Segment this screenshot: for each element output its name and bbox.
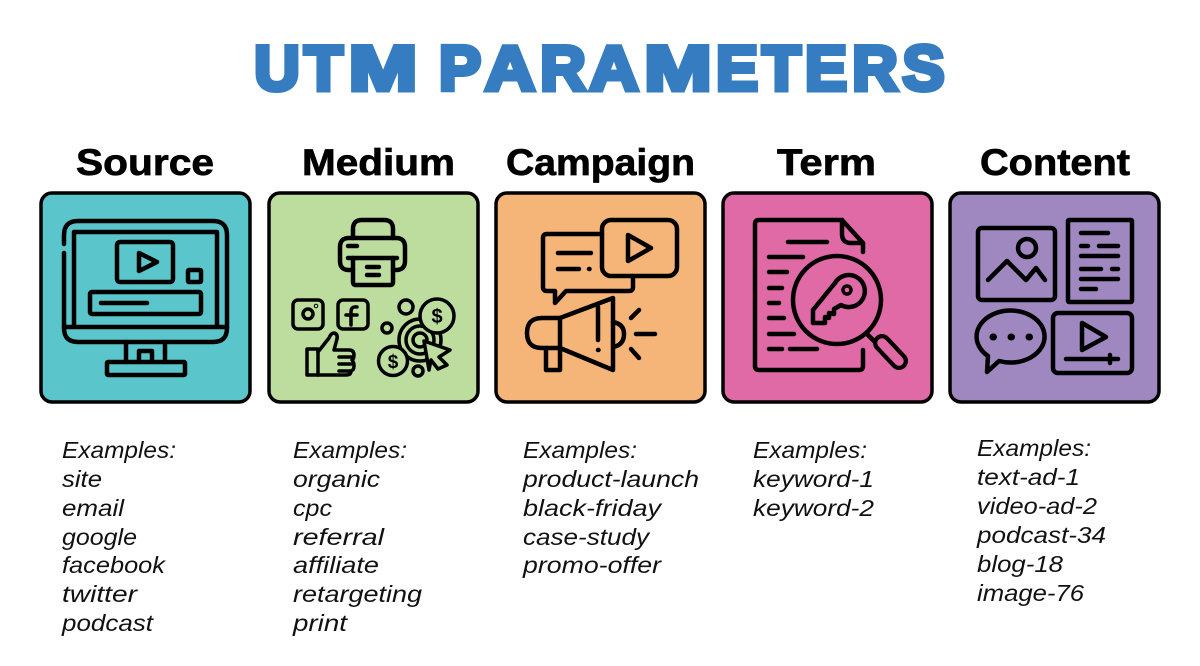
examples: source: facebook: [62, 552, 167, 578]
title: T: [304, 34, 343, 104]
examples: medium: cpc: [293, 495, 333, 521]
icon: video and chat bubbles: [543, 220, 677, 303]
title: R: [540, 34, 586, 104]
examples: content: video-ad-2: [977, 493, 1097, 519]
examples: campaign: product-launch: [522, 466, 699, 492]
examples: term: Examples:: [753, 437, 867, 463]
title: E: [805, 34, 847, 104]
examples: medium: [292, 437, 422, 636]
panel: source: [41, 193, 250, 402]
examples: medium: organic: [293, 466, 381, 492]
column: content: [950, 142, 1159, 606]
icon: computer monitor with video: [64, 221, 227, 375]
examples: medium: print: [292, 610, 349, 636]
column: campaign: [496, 142, 705, 578]
title: A: [484, 34, 535, 104]
examples: medium: affiliate: [293, 552, 379, 578]
examples: source: twitter: [62, 581, 139, 607]
examples: source: google: [62, 524, 137, 550]
column: medium: [269, 142, 478, 636]
examples: medium: retargeting: [293, 581, 422, 607]
icon: target with coins and cursor: $: [431, 306, 443, 328]
icon: target with coins and cursor: $: [388, 352, 399, 373]
examples: term: [753, 437, 874, 521]
title: U: [254, 34, 300, 104]
examples: content: podcast-34: [976, 522, 1106, 548]
title: [254, 34, 945, 104]
icon: printer: [340, 220, 405, 285]
column: term: [723, 142, 932, 521]
examples: content: image-76: [977, 580, 1084, 606]
heading: source: Source: [76, 142, 214, 183]
heading: content: Content: [980, 142, 1130, 183]
examples: term: keyword-2: [753, 495, 874, 521]
examples: campaign: Examples:: [523, 437, 637, 463]
examples: campaign: black-friday: [523, 495, 663, 521]
examples: source: [61, 437, 176, 636]
examples: content: text-ad-1: [977, 464, 1080, 490]
panel: term: [723, 193, 932, 402]
examples: term: keyword-1: [753, 466, 874, 492]
panel: medium: [269, 193, 478, 402]
icon: target with coins and cursor: [378, 299, 454, 376]
examples: content: [976, 435, 1106, 606]
icon: image: [978, 228, 1055, 300]
panel: campaign: [496, 193, 705, 402]
examples: medium: Examples:: [293, 437, 407, 463]
icon: speech bubble: [977, 311, 1045, 372]
icon: text document: [1068, 220, 1132, 302]
examples: medium: referral: [293, 524, 385, 550]
examples: source: Examples:: [62, 437, 176, 463]
title: P: [439, 34, 481, 104]
heading: medium: Medium: [302, 142, 455, 183]
title: E: [716, 34, 758, 104]
title: A: [589, 34, 639, 104]
icon: thumbs up: [307, 333, 354, 375]
panel: content: [950, 193, 1159, 402]
examples: source: email: [62, 495, 125, 521]
examples: content: blog-18: [977, 551, 1063, 577]
title: M: [349, 34, 417, 104]
heading: campaign: Campaign: [506, 142, 695, 183]
icon: megaphone: [527, 298, 655, 370]
title: M: [644, 34, 711, 104]
examples: campaign: promo-offer: [522, 552, 663, 578]
icon: document with key magnifier: [755, 220, 899, 370]
heading: term: Term: [777, 142, 876, 183]
column: source: [41, 142, 250, 636]
examples: campaign: case-study: [523, 524, 651, 550]
examples: campaign: [522, 437, 699, 578]
title: S: [902, 34, 945, 104]
title: T: [762, 34, 801, 104]
icon: video player: [1053, 313, 1132, 373]
title: R: [852, 34, 898, 104]
examples: source: site: [62, 466, 102, 492]
icon: instagram: [293, 300, 323, 329]
examples: content: Examples:: [977, 435, 1091, 461]
examples: source: podcast: [61, 610, 155, 636]
icon: facebook: [338, 300, 368, 329]
